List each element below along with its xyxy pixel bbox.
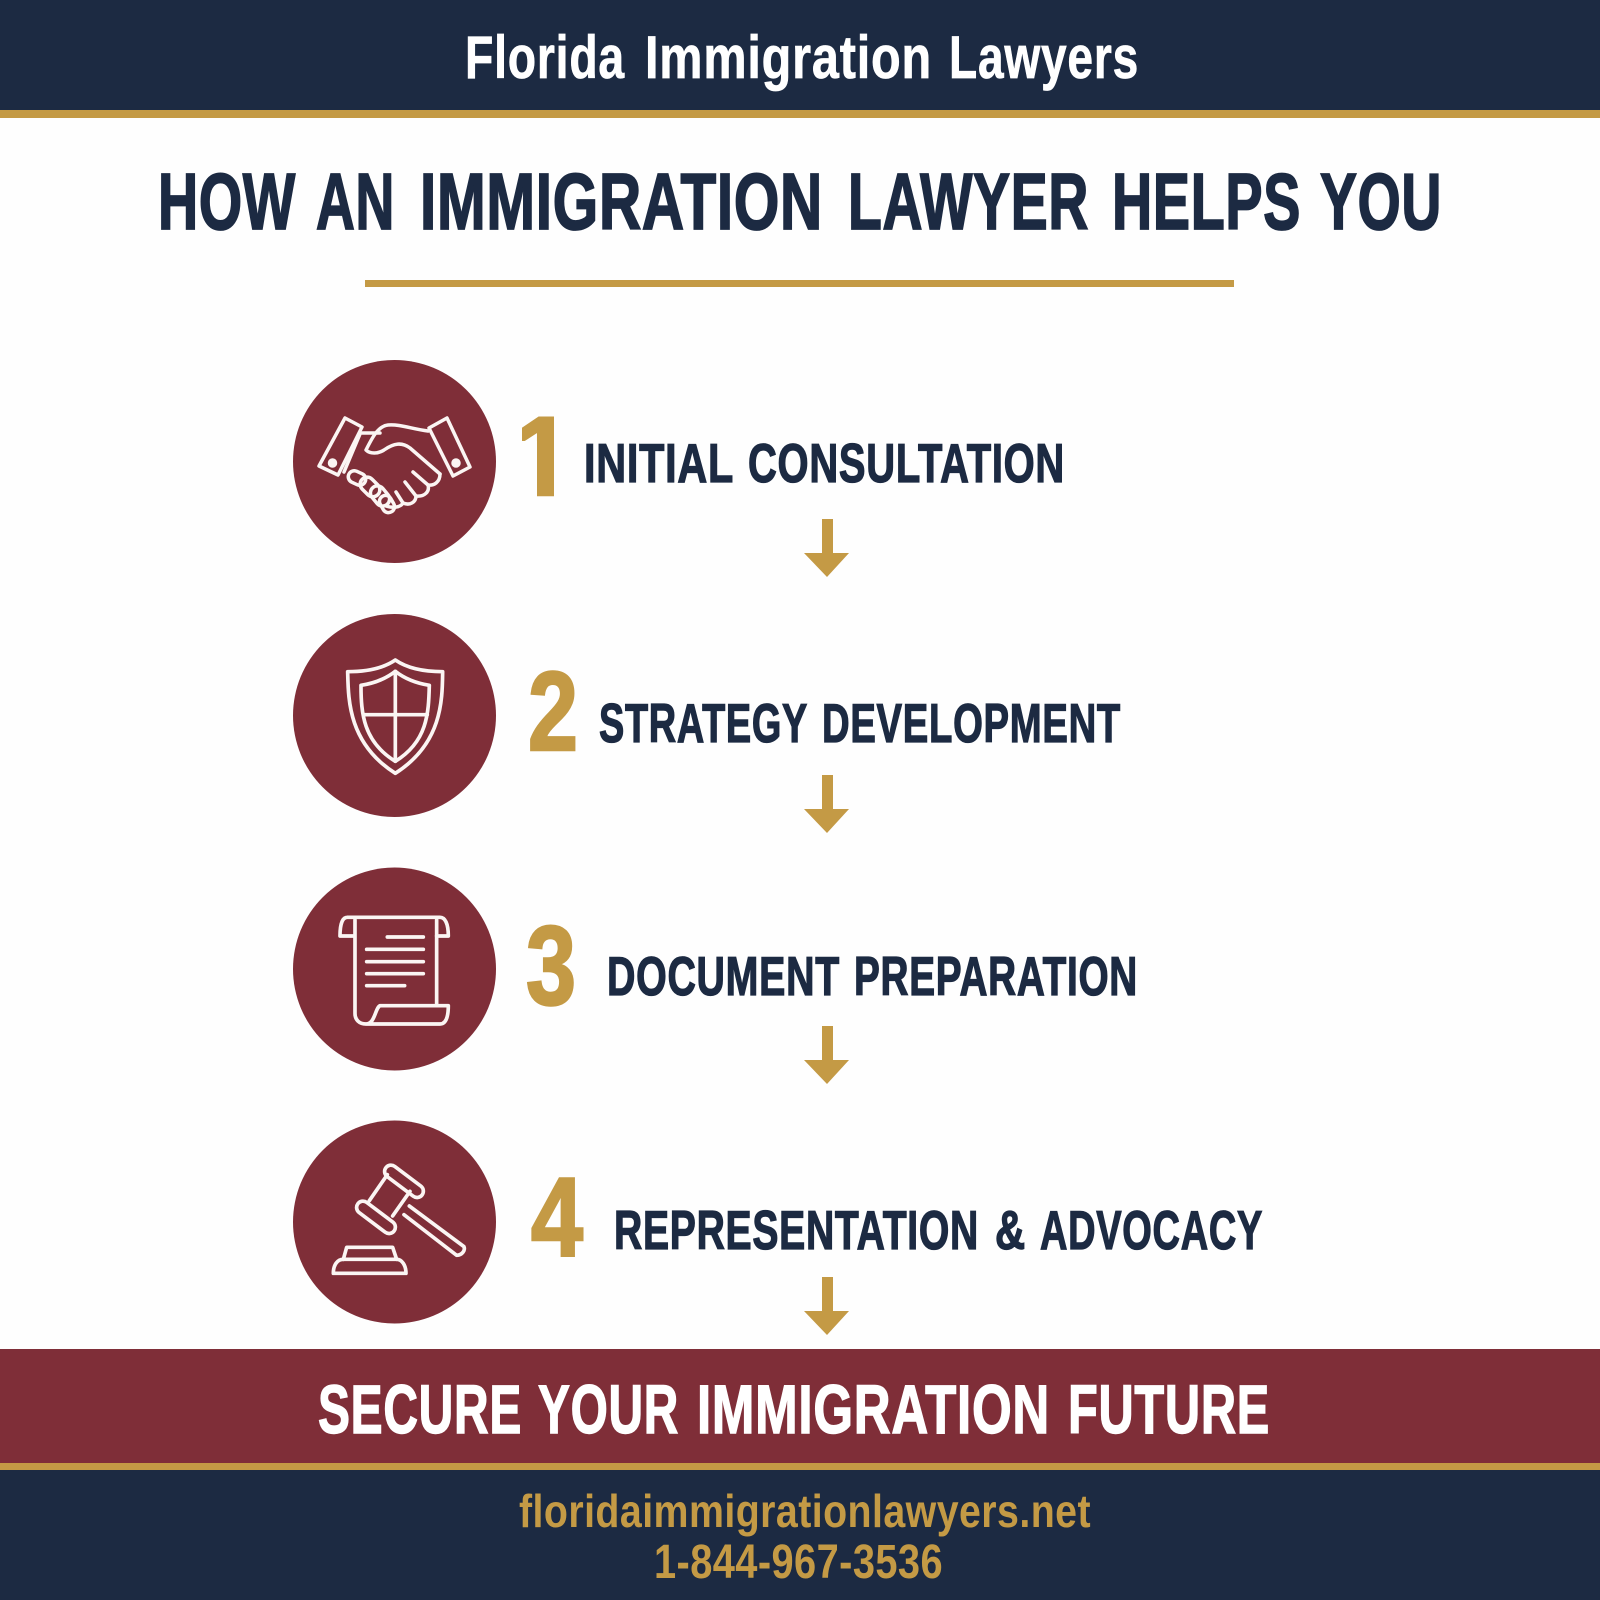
- step label: CONSULTATION: [748, 432, 1065, 494]
- footer band: [0, 1470, 1600, 1600]
- header firm name: Florida: [465, 24, 625, 91]
- step label: ADVOCACY: [1040, 1199, 1263, 1261]
- step number 1: 1: [513, 394, 573, 519]
- banner text: IMMIGRATION: [697, 1371, 1050, 1448]
- title: YOU: [1320, 157, 1442, 246]
- icon: shield: [348, 660, 443, 773]
- step number 2: 2: [528, 649, 578, 774]
- banner text: YOUR: [538, 1371, 679, 1448]
- banner: secure your immigration future: [0, 1349, 1600, 1470]
- title: HELPS: [1112, 157, 1301, 246]
- banner text: FUTURE: [1068, 1371, 1270, 1448]
- arrow 1: [804, 519, 849, 577]
- header firm name: Immigration: [645, 24, 932, 91]
- step label: DEVELOPMENT: [822, 692, 1121, 754]
- arrow 3: [804, 1026, 849, 1084]
- arrow 2: [804, 775, 849, 833]
- step number 4: 4: [531, 1155, 583, 1280]
- title: IMMIGRATION: [420, 157, 823, 246]
- title: LAWYER: [848, 157, 1089, 246]
- icon: handshake: [319, 418, 470, 515]
- step 1: initial consultation: [293, 360, 1065, 563]
- header firm name: Lawyers: [949, 24, 1139, 91]
- arrow 4: [804, 1277, 849, 1335]
- title: AN: [316, 157, 395, 246]
- banner text: SECURE: [318, 1371, 522, 1448]
- icon: scroll: [340, 917, 448, 1024]
- step label: &: [995, 1199, 1026, 1261]
- title: [158, 157, 1442, 246]
- title underline: [365, 280, 1234, 287]
- step 3: document preparation: [293, 868, 1138, 1070]
- step 4: representation and advocacy: [293, 1120, 1263, 1324]
- header band: [0, 0, 1600, 118]
- footer website: floridaimmigrationlawyers.net: [519, 1485, 1091, 1537]
- step label: REPRESENTATION: [614, 1199, 979, 1261]
- footer phone: 1-844-967-3536: [654, 1536, 943, 1589]
- icon: gavel: [333, 1163, 464, 1273]
- title: HOW: [158, 157, 296, 246]
- step label: DOCUMENT: [607, 945, 840, 1007]
- step label: PREPARATION: [854, 945, 1138, 1007]
- step 2: strategy development: [293, 614, 1121, 817]
- step label: INITIAL: [584, 432, 734, 494]
- step label: STRATEGY: [599, 692, 808, 754]
- step number 3: 3: [526, 903, 576, 1028]
